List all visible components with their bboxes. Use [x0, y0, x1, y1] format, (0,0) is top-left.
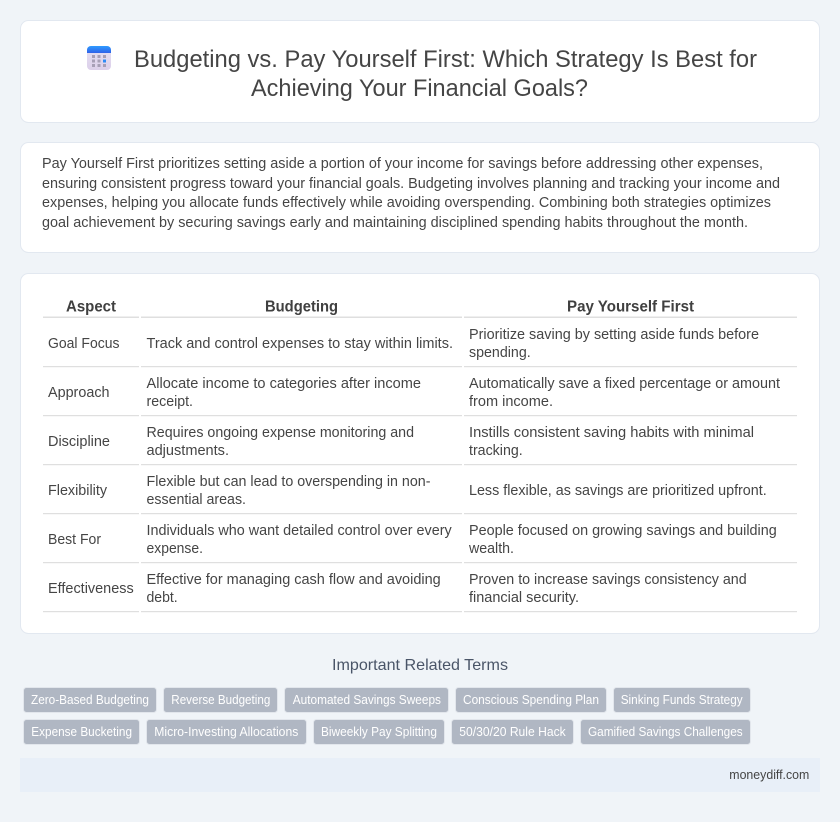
tag: reverse budgeting: Reverse Budgeting	[171, 693, 270, 707]
text block: summary: Pay Yourself First prioritizes setting aside a portion of your income for savings before addressing other expenses,	[42, 156, 763, 172]
row: goal focus: spending.	[469, 345, 531, 361]
tag: automated savings sweeps: Automated Savings Sweeps	[293, 693, 441, 707]
text block: summary: goal achievement by securing savings early and maintaining disciplined spending habits throughout the month.	[42, 215, 748, 231]
tag: conscious spending plan: Conscious Spending Plan	[463, 693, 599, 707]
tag: expense bucketing: Expense Bucketing	[31, 725, 132, 739]
table header row: Aspect	[66, 298, 117, 316]
tag: micro-investing allocations	[146, 720, 306, 744]
row: best for: expense.	[146, 541, 203, 557]
row: goal focus: Goal Focus	[48, 336, 120, 352]
table header row: Budgeting	[265, 298, 338, 316]
text block: summary: expenses, helping you allocate funds effectively while avoiding overspending. Combining both strategies optimizes	[42, 195, 771, 211]
panel: comparison table	[20, 274, 820, 634]
text block: summary: ensuring consistent progress toward your financial goals. Budgeting involves planning and tracking your income and	[42, 176, 780, 192]
tag: reverse budgeting	[164, 688, 278, 712]
row: approach: Automatically save a fixed percentage or amount	[469, 376, 780, 392]
heading: important related terms: Important Related Terms	[332, 657, 508, 674]
row: approach: Approach	[48, 385, 110, 401]
tag: gamified savings challenges	[580, 720, 750, 744]
title	[134, 46, 757, 102]
tag: automated savings sweeps	[284, 688, 448, 712]
row: effectiveness: debt.	[146, 590, 178, 606]
row: discipline: Requires ongoing expense monitoring and	[146, 425, 414, 441]
tag: conscious spending plan	[456, 688, 606, 712]
tag: expense bucketing	[24, 720, 140, 744]
row: best for	[48, 523, 777, 557]
panel: header	[20, 20, 820, 122]
row: flexibility: Flexible but can lead to overspending in non-	[146, 474, 431, 490]
row: discipline: Discipline	[48, 434, 110, 450]
tag: 50/30/20 rule hack: 50/30/20 Rule Hack	[459, 725, 566, 739]
row: effectiveness: Effectiveness	[48, 581, 134, 597]
tag: biweekly pay splitting: Biweekly Pay Splitting	[321, 725, 437, 739]
row: flexibility: essential areas.	[146, 492, 246, 508]
row: flexibility: Flexibility	[48, 483, 108, 499]
title: Budgeting vs. Pay Yourself First: Which Strategy Is Best for	[134, 46, 757, 73]
row: best for: People focused on growing savings and building	[469, 523, 777, 539]
row: effectiveness	[48, 572, 747, 606]
tag: sinking funds strategy	[614, 688, 750, 712]
row: approach	[48, 376, 780, 410]
row: discipline	[48, 425, 754, 459]
tag: 50/30/20 rule hack	[452, 720, 574, 744]
row: discipline: Instills consistent saving habits with minimal	[469, 425, 754, 441]
table header row: Pay Yourself First	[567, 298, 695, 316]
row: approach: Allocate income to categories after income	[146, 376, 421, 392]
row: flexibility	[48, 474, 767, 508]
tag: gamified savings challenges: Gamified Savings Challenges	[588, 725, 743, 739]
text block: summary	[42, 156, 780, 231]
row: goal focus: Prioritize saving by setting aside funds before	[469, 327, 759, 343]
tag: sinking funds strategy: Sinking Funds Strategy	[621, 693, 743, 707]
footer	[20, 758, 820, 792]
row: goal focus	[48, 327, 759, 361]
table header row	[66, 298, 695, 316]
tag: zero-based budgeting: Zero-Based Budgeting	[31, 693, 149, 707]
icon: calendar	[87, 46, 111, 70]
panel: summary paragraph	[20, 142, 820, 252]
row: effectiveness: Proven to increase savings consistency and	[469, 572, 747, 588]
row: best for: Best For	[48, 532, 101, 548]
row: best for: Individuals who want detailed control over every	[146, 523, 452, 539]
tag: zero-based budgeting	[24, 688, 156, 712]
row: goal focus: Track and control expenses to stay within limits.	[146, 336, 453, 352]
row: discipline: adjustments.	[146, 443, 229, 459]
row: approach: from income.	[469, 394, 553, 410]
row: approach: receipt.	[146, 394, 193, 410]
row: effectiveness: Effective for managing cash flow and avoiding	[146, 572, 441, 588]
row: flexibility: Less flexible, as savings are prioritized upfront.	[469, 483, 767, 499]
row: best for: wealth.	[468, 541, 514, 557]
footer: moneydiff.com	[729, 767, 809, 782]
tag: micro-investing allocations: Micro-Investing Allocations	[154, 725, 298, 739]
row: discipline: tracking.	[469, 443, 523, 459]
title: Achieving Your Financial Goals?	[251, 75, 588, 102]
row: effectiveness: financial security.	[469, 590, 579, 606]
tag list: related terms	[24, 688, 750, 744]
tag: biweekly pay splitting	[314, 720, 444, 744]
